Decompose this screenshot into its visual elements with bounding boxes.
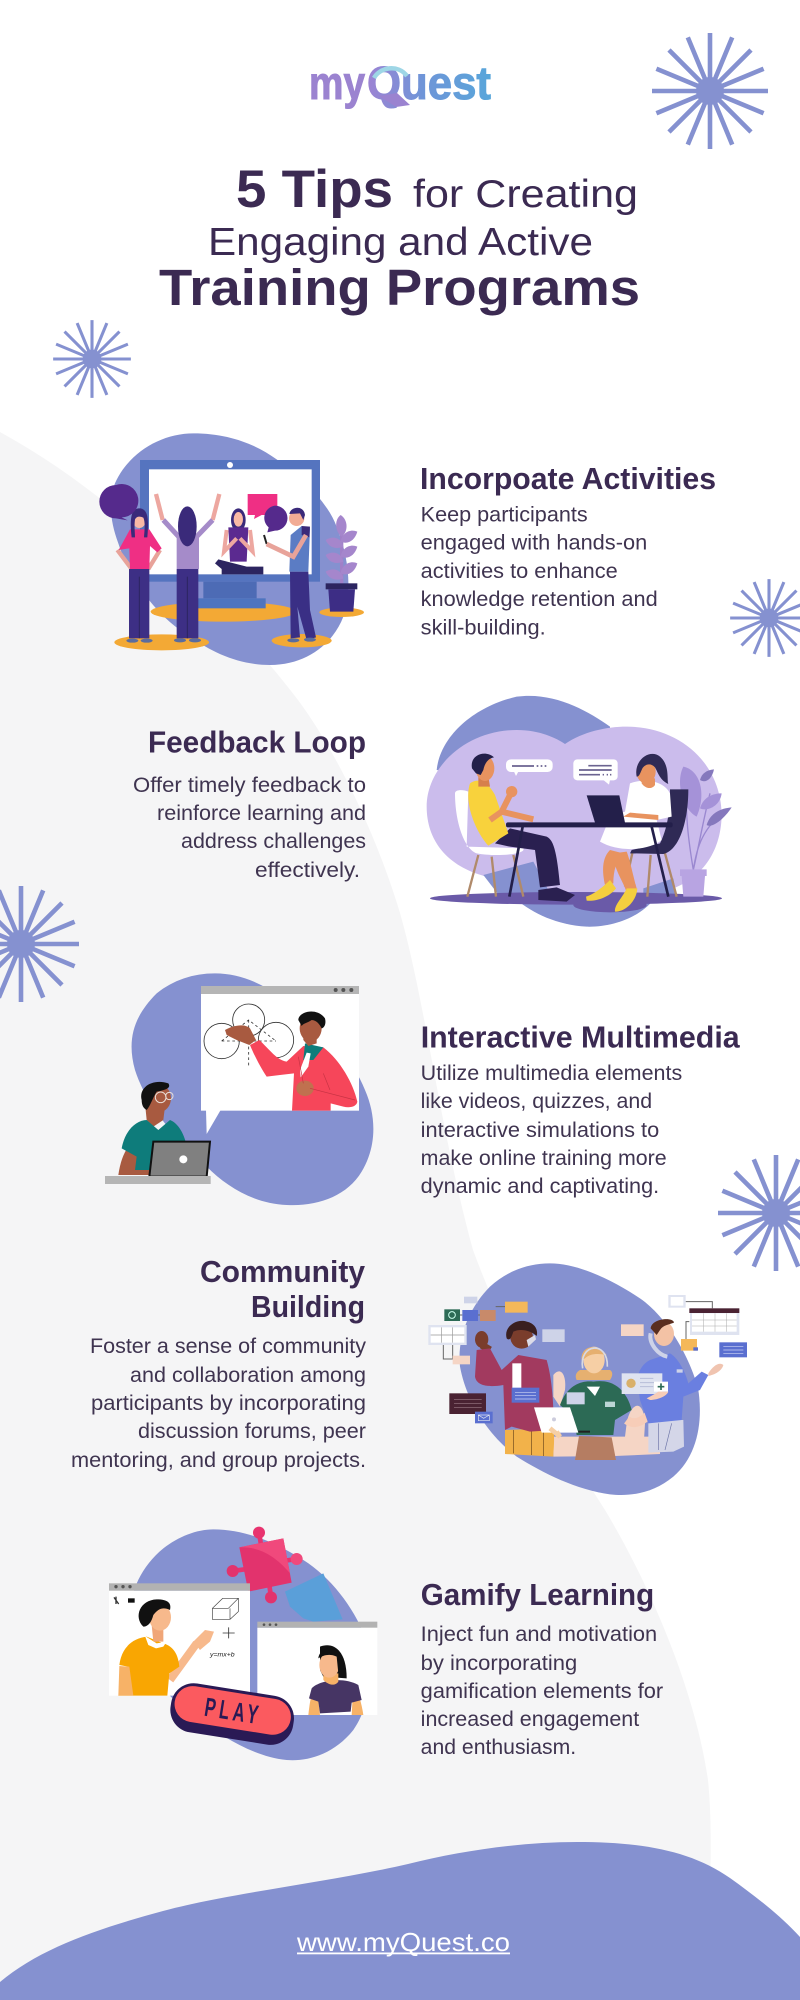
title	[159, 160, 640, 316]
section one text: Keep participants	[421, 504, 588, 527]
title: Engaging and Active	[208, 221, 593, 264]
section four text: Building	[251, 1289, 365, 1324]
section three text: like videos, quizzes, and	[421, 1090, 652, 1113]
pink puzzle piece	[227, 1527, 303, 1603]
monitor	[140, 460, 320, 622]
woman with raised arms	[156, 494, 219, 642]
decorative star: right edge	[718, 1155, 800, 1271]
panel: Feedback Loop illustration	[427, 696, 732, 927]
presenter	[225, 1011, 357, 1111]
lavender backdrop	[427, 727, 722, 897]
ID card	[622, 1373, 668, 1400]
chat note	[542, 1329, 565, 1342]
pink speech bubble	[248, 494, 277, 519]
right widgets	[621, 1295, 747, 1357]
title: 5 Tips	[236, 160, 393, 219]
section one text: Incorpoate Activities	[420, 461, 716, 496]
seated man	[468, 754, 575, 902]
table	[506, 822, 673, 897]
section five text: Inject fun and motivation	[421, 1623, 657, 1646]
left widgets	[428, 1297, 528, 1423]
section three text: Interactive Multimedia	[421, 1020, 740, 1055]
decorative star: right of section one	[730, 579, 800, 657]
section four text: Community	[200, 1254, 366, 1289]
section one text: activities to enhance	[421, 560, 618, 583]
blob	[130, 1529, 369, 1760]
section five text: and enthusiasm.	[421, 1736, 576, 1759]
woman with headset	[534, 1347, 663, 1460]
section four text	[71, 1254, 367, 1472]
speech bubble: woman	[573, 759, 618, 785]
section five text: Gamify Learning	[421, 1577, 654, 1612]
logo: Quest	[367, 57, 491, 109]
geometry diagram	[204, 1004, 294, 1066]
panel: Incorporate Activities illustration	[99, 433, 364, 665]
section four text: mentoring, and group projects.	[71, 1449, 366, 1472]
section three text	[421, 1020, 740, 1198]
section three text: dynamic and captivating.	[421, 1175, 659, 1198]
panel: Community Building illustration	[428, 1263, 747, 1495]
section one text: engaged with hands-on	[421, 532, 647, 554]
desk	[105, 1176, 211, 1184]
section two text	[133, 725, 366, 882]
man with phone	[637, 1319, 723, 1453]
section one text: knowledge retention and	[421, 588, 658, 611]
speech bubble: man	[506, 759, 553, 776]
blue puzzle piece	[285, 1573, 343, 1622]
footer website link: www.myQuest.co	[296, 1927, 510, 1957]
woman in pink	[117, 508, 162, 643]
section two text: Feedback Loop	[148, 725, 366, 760]
section five text: increased engagement	[421, 1708, 639, 1731]
section four text: Foster a sense of community	[90, 1335, 367, 1358]
presentation window	[201, 986, 359, 1134]
section three text: Utilize multimedia elements	[421, 1062, 682, 1085]
blob lower	[517, 900, 653, 927]
plant	[680, 767, 732, 897]
logo: my	[309, 57, 365, 109]
blob back	[437, 696, 610, 780]
video window: teacher	[109, 1583, 250, 1696]
footer wave	[0, 1842, 800, 2000]
PLAY button	[167, 1680, 297, 1748]
logo	[309, 57, 491, 109]
section four text: and collaboration among	[130, 1364, 366, 1387]
speech bubble: purple left	[99, 484, 138, 520]
title: for Creating	[413, 173, 638, 216]
decorative star: left edge	[0, 886, 79, 1002]
laptop	[587, 795, 625, 823]
laptop	[149, 1142, 210, 1177]
video window: student	[257, 1622, 377, 1715]
purple speech bubble right	[264, 506, 287, 532]
background shapes	[553, 1371, 660, 1457]
seated woman	[586, 754, 672, 912]
PLAY button: PLAY	[203, 1692, 264, 1731]
woman's chair	[625, 789, 688, 897]
woman on the phone	[475, 1321, 554, 1457]
floor	[430, 892, 722, 905]
man with phone	[264, 508, 316, 642]
sitting woman	[215, 508, 263, 574]
blob	[111, 433, 348, 665]
section five text: by incorporating	[421, 1652, 577, 1675]
panel: Interactive Multimedia illustration	[105, 973, 373, 1205]
section five text	[421, 1577, 663, 1759]
teacher	[118, 1599, 214, 1696]
student	[308, 1645, 363, 1715]
video window: teacher: y=mx+b	[209, 1652, 235, 1659]
blob	[132, 973, 373, 1205]
decorative star: upper left	[53, 320, 131, 398]
section two text: effectively.	[255, 859, 360, 882]
plant	[326, 515, 357, 612]
blob	[459, 1263, 700, 1495]
background: grey curved panel	[0, 432, 711, 2000]
decorative star: top right	[652, 33, 768, 149]
panel: Gamify Learning illustration	[109, 1527, 377, 1760]
section two text: Offer timely feedback to	[133, 774, 366, 797]
student	[118, 1082, 186, 1175]
title: Training Programs	[159, 259, 640, 316]
section two text: reinforce learning and	[157, 802, 366, 825]
floor shadows	[114, 608, 364, 650]
section five text: gamification elements for	[421, 1680, 663, 1703]
section three text: make online training more	[421, 1147, 667, 1170]
section one text	[420, 461, 716, 640]
man's chair	[455, 790, 524, 897]
section four text: discussion forums, peer	[138, 1420, 366, 1443]
section three text: interactive simulations to	[421, 1119, 659, 1142]
section one text: skill-building.	[421, 616, 546, 640]
section four text: participants by incorporating	[91, 1392, 366, 1415]
section two text: address challenges	[181, 830, 366, 853]
